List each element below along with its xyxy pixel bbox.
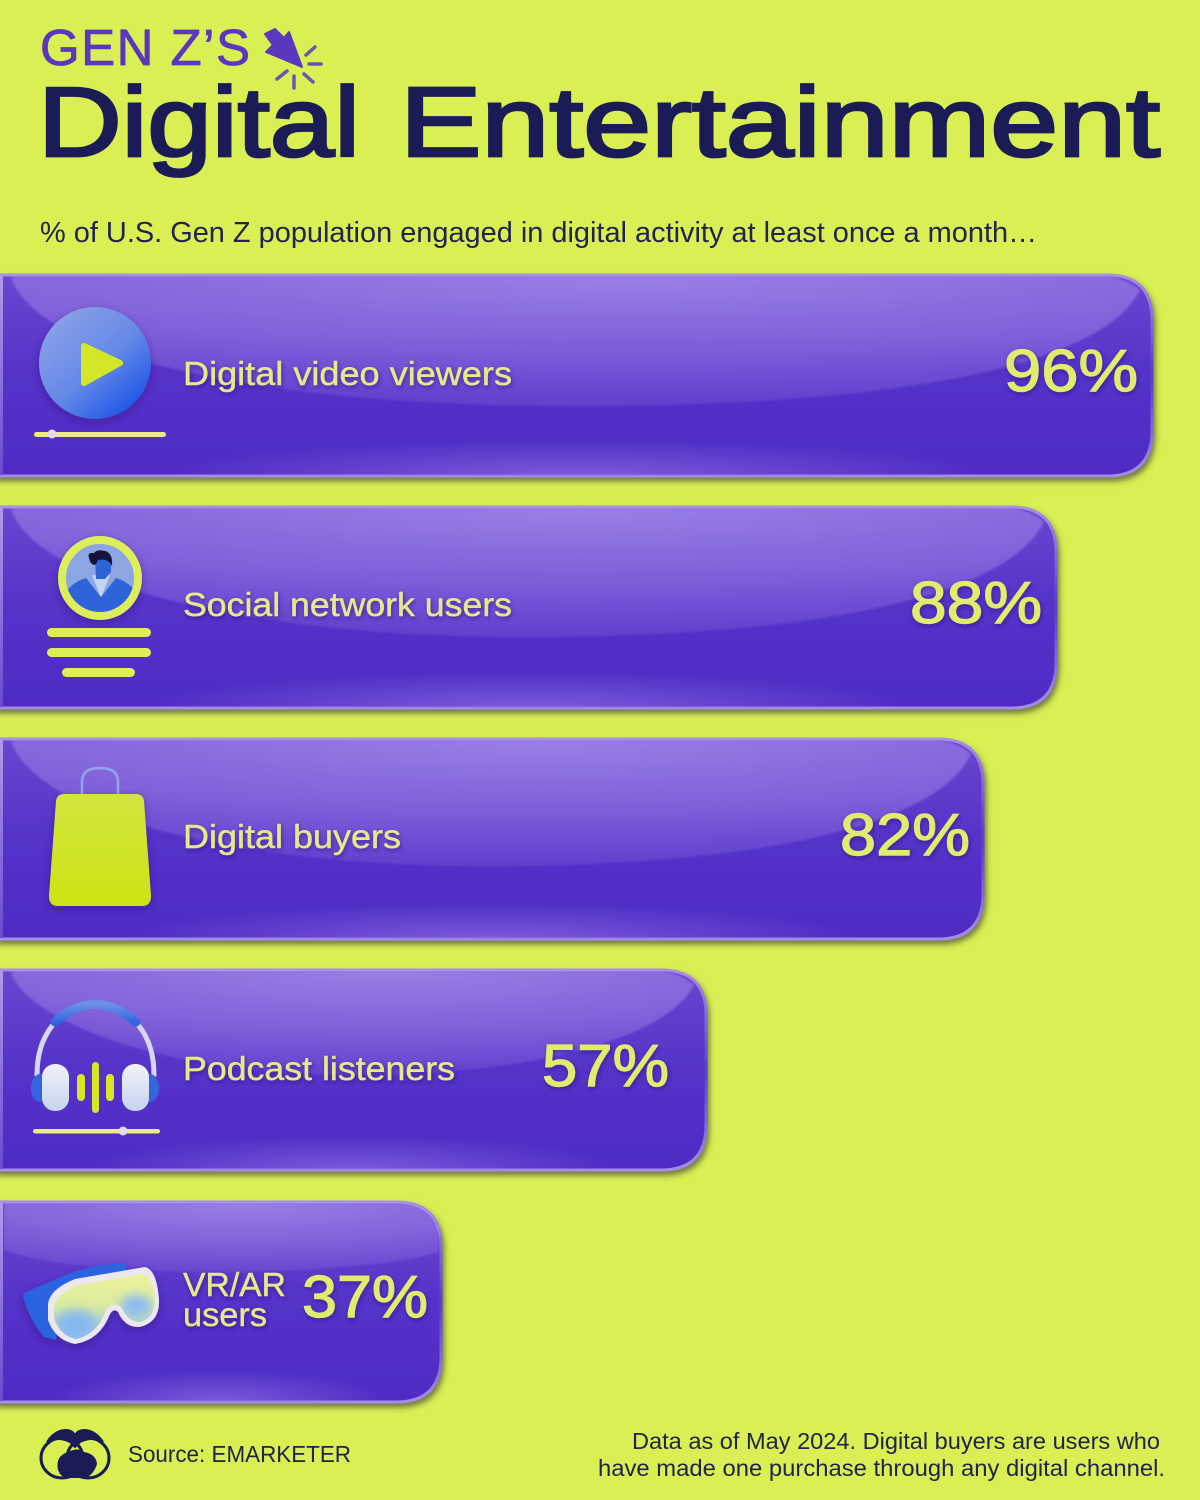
source: Source: EMARKETER (128, 1441, 351, 1467)
icon: play button (34, 307, 166, 438)
panel: VR/AR users bar (0, 1202, 441, 1434)
label: social network users: Social network users (183, 586, 512, 623)
heading: Gen Z's: GEN Z’S (40, 19, 250, 76)
value: 37%: 37% (302, 1264, 428, 1330)
title: Entertainment (400, 67, 1160, 177)
footnote: have made one purchase through any digital channel. (598, 1455, 1165, 1481)
panel: digital video viewers bar (0, 275, 1152, 512)
label: VR/AR users: VR/AR (183, 1266, 286, 1303)
icon: cursor click (265, 29, 321, 88)
label: VR/AR users: users (183, 1296, 267, 1333)
value: 88%: 88% (910, 570, 1042, 636)
icon: headphones (31, 1004, 160, 1136)
label: podcast listeners: Podcast listeners (183, 1050, 455, 1087)
label: digital video viewers: Digital video viewers (183, 355, 512, 392)
value: 57%: 57% (542, 1033, 669, 1099)
panel: social network users bar (0, 507, 1056, 744)
value: 82%: 82% (840, 802, 970, 868)
subtitle: % of U.S. Gen Z population engaged in digital activity at least once a month… (40, 217, 1037, 249)
icon: shopping bag (49, 768, 151, 906)
label: VR/AR users (183, 1266, 286, 1333)
icon: social profile (47, 540, 151, 677)
title (38, 67, 1160, 177)
panel: podcast listeners bar (0, 970, 706, 1204)
label: digital buyers: Digital buyers (183, 818, 401, 855)
footnote: Data as of May 2024. Digital buyers are users who (632, 1428, 1160, 1454)
icon: VR goggles (23, 1264, 159, 1344)
title: Digital (38, 67, 360, 177)
value: 96%: 96% (1004, 338, 1138, 404)
footnote (598, 1428, 1165, 1481)
icon: logo (41, 1430, 109, 1478)
panel: digital buyers bar (0, 739, 983, 975)
